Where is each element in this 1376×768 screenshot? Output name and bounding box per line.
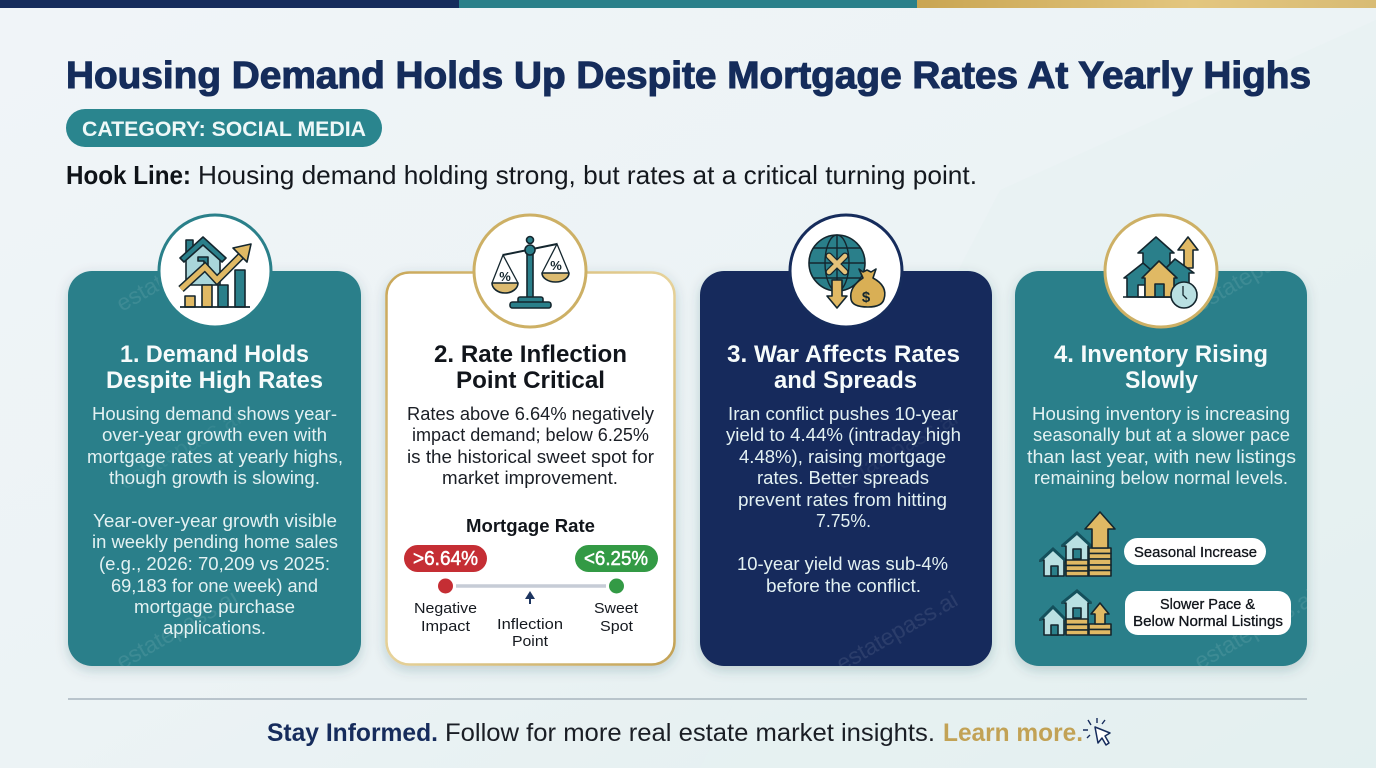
mortgage rate scale: Inflection [497, 616, 563, 633]
label: seasonal increase [1124, 538, 1266, 565]
hook line: Hook Line: [66, 160, 191, 190]
footer call to action: Follow for more real estate market insights. [445, 719, 935, 747]
label: slower pace and below normal listings: Slower Pace & [1160, 597, 1255, 613]
heading [106, 341, 323, 394]
body text: seasonally but at a slower pace [1033, 425, 1290, 445]
icon: balance scale with percent pans: % [499, 269, 511, 284]
body text: 10-year yield was sub-4% [737, 554, 948, 574]
label: slower pace and below normal listings [1125, 591, 1291, 635]
body text: 7.75%. [816, 511, 871, 531]
mortgage rate scale: Point [512, 633, 549, 650]
icon: house with rising chart [159, 215, 271, 327]
body text [87, 404, 343, 638]
icon: globe, down arrow and money bag [790, 215, 902, 327]
panel: 1. demand holds: estatepass.ai [112, 226, 242, 316]
body text [726, 404, 961, 596]
panel: 3. war affects rates: estatepass.ai [832, 404, 962, 494]
sweet spot pill: <6.25% [584, 548, 648, 570]
body text: Housing inventory is increasing [1032, 404, 1290, 424]
mortgage rate scale: Sweet [594, 600, 639, 617]
body text: before the conflict. [766, 576, 921, 596]
heading: Despite High Rates [106, 367, 323, 394]
body text: (e.g., 2026: 70,209 vs 2025: [99, 554, 330, 574]
body text: mortgage purchase [134, 597, 295, 617]
label: seasonal increase: Seasonal Increase [1134, 545, 1257, 561]
category badge: CATEGORY: SOCIAL MEDIA [82, 118, 366, 141]
body text: over-year growth even with [102, 425, 327, 445]
body text: 69,183 for one week) and [111, 576, 318, 596]
icon: balance scale with percent pans [474, 215, 586, 327]
panel: 4. inventory rising [1015, 215, 1320, 674]
heading [434, 341, 627, 394]
body text: remaining below normal levels. [1034, 468, 1288, 488]
icon: clicking cursor [1083, 718, 1110, 745]
sweet spot pill [575, 545, 658, 572]
mortgage rate scale: Spot [600, 618, 634, 635]
panel: 3. war affects rates [700, 215, 992, 676]
heading: 2. Rate Inflection [434, 341, 627, 368]
icon: houses, rising arrow and clock [1105, 215, 1217, 327]
body text: Housing demand shows year- [92, 404, 337, 424]
mortgage rate scale: Mortgage Rate [466, 516, 595, 536]
panel: 1. demand holds: estatepass.ai [114, 404, 245, 494]
body text [1027, 404, 1296, 488]
negative rate pill: >6.64% [413, 548, 478, 570]
body text: prevent rates from hitting [738, 490, 947, 510]
panel: 3. war affects rates: estatepass.ai [832, 586, 962, 676]
panel: 1. demand holds [68, 215, 361, 674]
category badge [66, 109, 382, 147]
top accent bar [0, 0, 1376, 8]
footer call to action: Learn more. [943, 719, 1083, 747]
heading: Slowly [1125, 367, 1199, 394]
icon: globe, down arrow and money bag: $ [862, 289, 871, 306]
body text: impact demand; below 6.25% [412, 425, 649, 445]
heading [1054, 341, 1268, 394]
panel: 4. inventory rising: estatepass.ai [1190, 226, 1320, 316]
mortgage rate scale: Impact [421, 618, 471, 635]
body text: in weekly pending home sales [92, 532, 338, 552]
title: Housing Demand Holds Up Despite Mortgage Rates At Yearly Highs [66, 55, 1311, 97]
body text: Rates above 6.64% negatively [407, 404, 654, 424]
body text: mortgage rates at yearly highs, [87, 447, 343, 467]
body text: market improvement. [442, 468, 618, 488]
heading [727, 341, 960, 394]
panel: 1. demand holds: estatepass.ai [112, 584, 242, 674]
footer call to action: Stay Informed. [267, 719, 438, 747]
hook line: Housing demand holding strong, but rates at a critical turning point. [198, 160, 977, 190]
heading: and Spreads [774, 367, 917, 394]
label: slower pace and below normal listings: Below Normal Listings [1133, 614, 1283, 630]
icon: balance scale with percent pans: % [550, 258, 562, 273]
body text: is the historical sweet spot for [407, 447, 654, 467]
icon: seasonal increase houses and coins [1040, 512, 1115, 576]
heading: Point Critical [456, 367, 605, 394]
arrow: inflection marker [525, 591, 535, 604]
mortgage rate scale: Negative [414, 600, 477, 617]
mortgage rate scale [404, 516, 658, 650]
body text: yield to 4.44% (intraday high [726, 425, 961, 445]
body text: though growth is slowing. [109, 468, 320, 488]
heading: 1. Demand Holds [120, 341, 309, 368]
icon: slower pace houses and coins [1040, 591, 1111, 635]
heading: 4. Inventory Rising [1054, 341, 1268, 368]
panel: 4. inventory rising: estatepass.ai [1190, 584, 1320, 674]
body text: than last year, with new listings [1027, 447, 1296, 467]
body text: applications. [163, 618, 266, 638]
body text: Year-over-year growth visible [93, 511, 337, 531]
negative rate pill [404, 545, 487, 572]
body text: rates. Better spreads [757, 468, 929, 488]
body text: 4.48%), raising mortgage [739, 447, 946, 467]
heading: 3. War Affects Rates [727, 341, 960, 368]
body text [407, 404, 654, 488]
body text: Iran conflict pushes 10-year [728, 404, 958, 424]
footer call to action [267, 718, 1110, 747]
panel: 2. rate inflection [386, 215, 674, 664]
